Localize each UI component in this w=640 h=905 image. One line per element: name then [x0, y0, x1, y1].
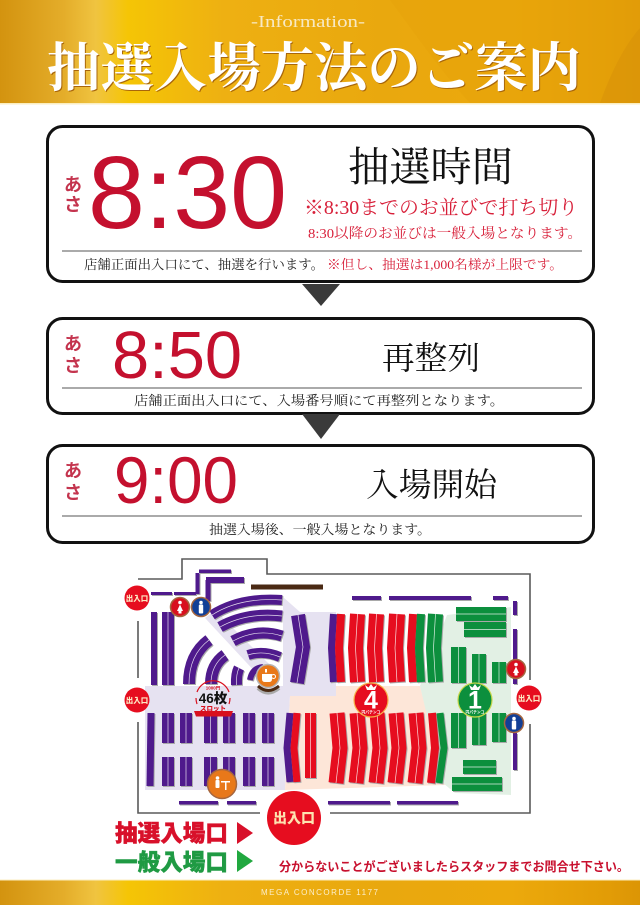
note: after 8:30: 8:30以降のお並びは一般入場となります。: [308, 226, 582, 242]
counter: brown bar: [251, 584, 323, 590]
label: morning: あ: [64, 457, 82, 483]
heading: re-queue: 再整列: [382, 340, 480, 376]
arrow down 2: [302, 414, 340, 439]
purple seat block: lower left rows: [150, 713, 310, 786]
badge: 4 yen zone: [354, 683, 388, 717]
icon: restroom women top: [170, 598, 190, 616]
legend: general entrance: 一般入場口: [115, 849, 228, 875]
icon: rest area: [208, 770, 236, 798]
icon: restroom men right: [504, 714, 524, 732]
arrow down 1: [302, 284, 340, 306]
panel: 8:50 re-queue: [48, 318, 594, 414]
caption: lottery place: 店舗正面出入口にて、抽選を行います。: [84, 257, 324, 272]
arrow: green: [237, 850, 253, 872]
label: morning: あ: [64, 330, 82, 356]
entrance top left: 出入口: [126, 593, 148, 604]
purple seat block: fan arcs: [189, 600, 303, 685]
title: 抽選入場方法のご案内: [47, 39, 581, 98]
label: morning: さ: [64, 352, 82, 378]
icon: restroom women right: [506, 660, 526, 678]
badge: 1 yen zone: 1: [468, 686, 482, 714]
badge: 1 yen zone: 円パチンコ: [466, 710, 485, 714]
badge: 4 yen zone: 4: [364, 686, 378, 714]
entrance main: 出入口: [273, 810, 315, 826]
badge: 46 slot: 46枚: [199, 690, 228, 706]
note: contact staff: 分からないことがございましたらスタッフまでお問合せ下さい。: [279, 859, 629, 874]
footer text: MEGA CONCORDE 1177: [261, 888, 379, 897]
entrance middle left: [124, 688, 150, 712]
floor map: [124, 559, 542, 845]
icon: restroom men top: [192, 598, 210, 616]
lower centre seat columns: [336, 713, 444, 783]
badge: 46 slot: [194, 681, 233, 716]
label: morning: さ: [64, 191, 82, 217]
note: cut-off: ※8:30までのお並びで打ち切り: [304, 197, 578, 219]
subtitle: Information: -Information-: [251, 12, 365, 31]
header band: [0, 0, 640, 104]
time 8:30: 8:30: [88, 135, 287, 250]
caption: limit: ※但し、抽選は1,000名様が上限です。: [327, 257, 563, 272]
label: morning: さ: [64, 479, 82, 505]
panel: 9:00 entry start: [48, 443, 594, 542]
badge: 46 slot: スロット: [200, 704, 226, 712]
green seat blocks: [451, 607, 506, 791]
entrance right: 出入口: [518, 693, 540, 704]
floor zones: [145, 597, 511, 795]
caption: re-queue: 店舗正面出入口にて、入場番号順にて再整列となります。: [134, 393, 504, 408]
label: morning: あ: [64, 171, 82, 197]
heading: lottery time: 抽選時間: [348, 144, 513, 190]
caption: general entry: 抽選入場後、一般入場となります。: [209, 522, 431, 537]
panel: 8:30 lottery time: [48, 126, 594, 282]
purple seat block: upper left columns: [151, 612, 174, 685]
entrance middle left: 出入口: [126, 695, 148, 706]
entrance right: [516, 686, 542, 710]
footer band: [0, 880, 640, 905]
icon: cafe: [256, 664, 280, 692]
entrance main: [267, 791, 321, 845]
badge: 46 slot: 1000円: [206, 686, 221, 690]
heading: entry start: 入場開始: [366, 467, 498, 504]
outer walls: [138, 559, 530, 813]
purple wall seats: [151, 570, 517, 804]
time 8:50: 8:50: [112, 318, 242, 393]
badge: 1 yen zone: [458, 683, 492, 717]
legend: lottery entrance: 抽選入場口: [115, 820, 228, 846]
time 9:00: 9:00: [114, 443, 238, 517]
arrow: red: [237, 822, 253, 844]
upper centre seat columns: [332, 614, 436, 682]
badge: 4 yen zone: 円パチンコ: [362, 710, 381, 714]
entrance top left: [124, 586, 150, 610]
